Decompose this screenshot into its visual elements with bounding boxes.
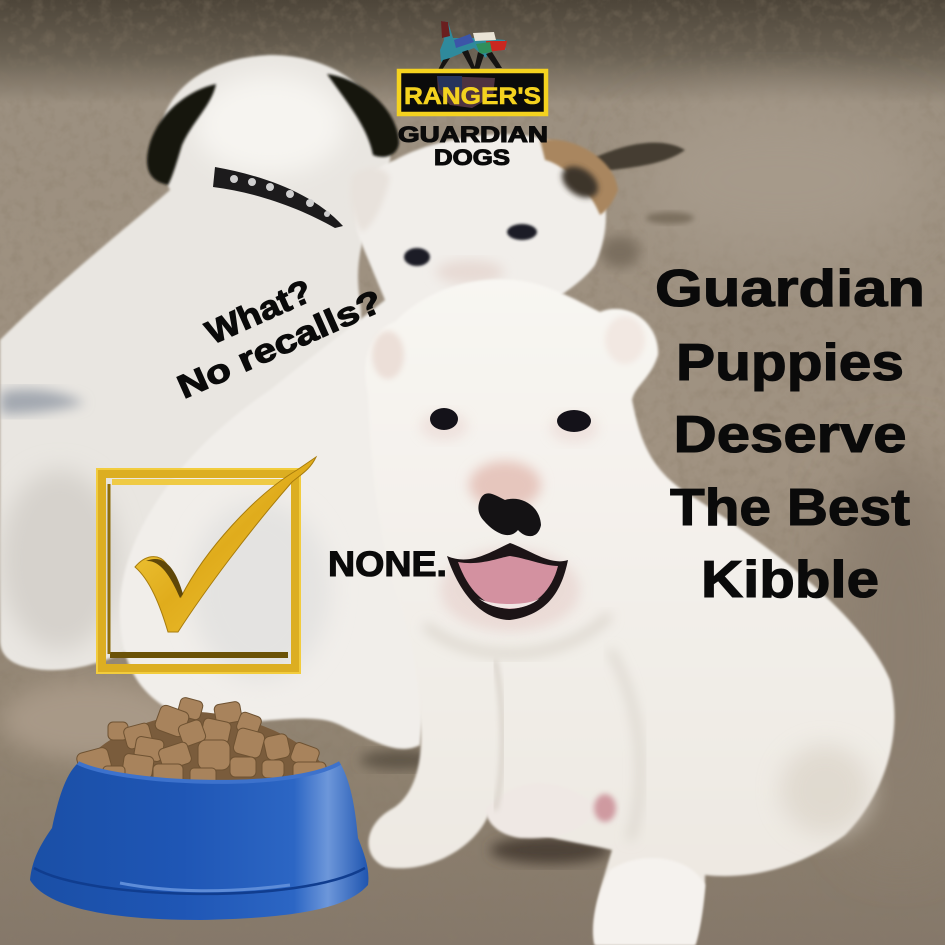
brand line DOGS: DOGS	[434, 145, 510, 170]
callout: NONE.: NONE.	[328, 545, 447, 584]
brand name RANGER'S: RANGER'S	[404, 83, 541, 110]
icon: USA flag map	[437, 76, 495, 108]
icon: flag-patterned dog silhouette	[438, 21, 507, 70]
icon: gold checkbox	[97, 457, 316, 673]
puppy: middle dog	[120, 134, 618, 749]
callout: What? No recalls?: No recalls?	[172, 282, 388, 406]
logo box	[399, 71, 546, 114]
kibble pile	[75, 696, 330, 790]
callout: What? No recalls?: What?	[200, 272, 317, 351]
callout: What? No recalls?	[156, 248, 388, 406]
bowl of kibble	[30, 696, 368, 920]
puppy: front dog	[365, 279, 894, 945]
logo: Ranger's Guardian Dogs	[398, 21, 548, 170]
blue bowl	[30, 763, 368, 920]
title: Guardian Puppies Deserve The Best Kibble: Guardian	[655, 260, 925, 318]
title: Guardian Puppies Deserve The Best Kibble: Kibble	[701, 551, 879, 609]
puppy: back left dog	[0, 55, 399, 670]
puppy face	[420, 408, 598, 632]
title: Guardian Puppies Deserve The Best Kibble: Puppies	[676, 334, 904, 392]
brand line GUARDIAN: GUARDIAN	[398, 122, 548, 147]
title: Guardian Puppies Deserve The Best Kibble	[655, 260, 925, 609]
title: Guardian Puppies Deserve The Best Kibble: Deserve	[674, 406, 906, 464]
icon: gold check mark	[135, 457, 316, 632]
title: Guardian Puppies Deserve The Best Kibble: The Best	[670, 479, 910, 537]
